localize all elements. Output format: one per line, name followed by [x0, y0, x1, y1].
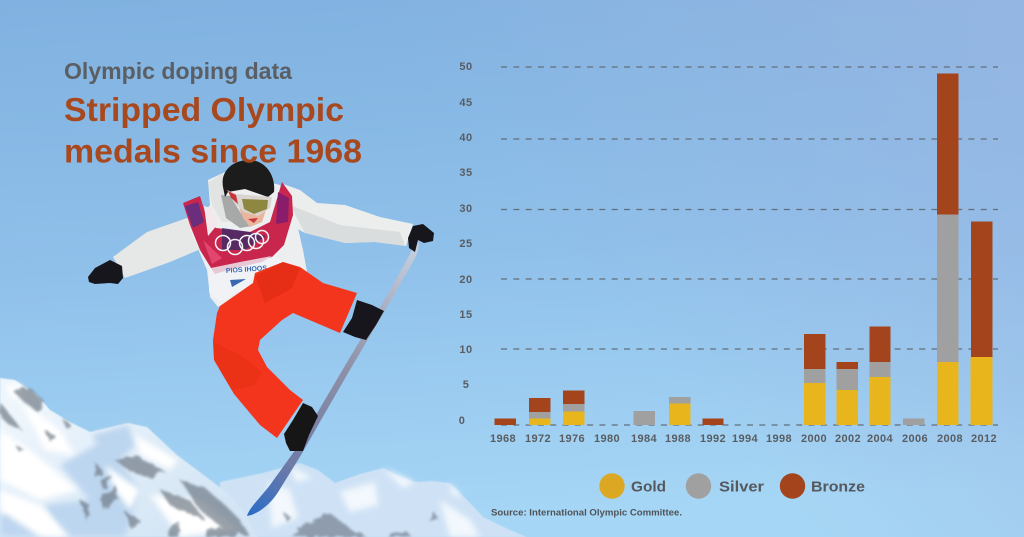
y axis labels: 25: [459, 238, 473, 250]
helmet: [223, 160, 274, 197]
headline: [64, 91, 362, 170]
near mountain: [0, 378, 258, 537]
y axis labels: 45: [459, 97, 473, 109]
gridlines: [501, 67, 998, 425]
snowboard: [247, 240, 419, 516]
x axis labels: 1968: [490, 433, 516, 445]
legend: gold: [599, 473, 666, 499]
olympic rings: [216, 230, 268, 254]
bar 2008: [937, 74, 958, 425]
bar 1988: [669, 397, 690, 425]
x axis labels: 1988: [665, 433, 691, 445]
stacked bar chart: [459, 61, 998, 445]
bar 1984: [634, 411, 655, 425]
source note: Source: International Olympic Committee.: [491, 508, 682, 518]
red pants: [213, 262, 357, 438]
x axis labels: 2000: [801, 433, 827, 445]
x axis labels: 1998: [766, 433, 792, 445]
x axis labels: 1976: [559, 433, 585, 445]
bar 2006: [903, 418, 924, 425]
legend: silver: [686, 473, 764, 499]
y axis labels: 5: [463, 379, 469, 391]
legend: gold: Gold: [631, 478, 666, 496]
bar 2000: [804, 334, 826, 425]
y axis labels: 30: [459, 203, 473, 215]
y axis labels: 0: [459, 415, 465, 427]
right glove: [408, 224, 434, 252]
x axis labels: 2008: [937, 433, 963, 445]
boot lower: [284, 403, 318, 451]
jacket: [190, 172, 308, 307]
x axis labels: 1984: [631, 433, 658, 445]
legend: [599, 473, 865, 499]
x axis labels: 1980: [594, 433, 620, 445]
x axis labels: 1992: [700, 433, 726, 445]
y axis labels: [459, 61, 473, 427]
legend: silver: Silver: [719, 478, 764, 496]
bar 1976: [563, 390, 584, 425]
bar 2012: [970, 222, 992, 425]
legend: bronze: [780, 473, 865, 499]
y axis labels: 20: [459, 274, 473, 286]
goggles: [227, 190, 272, 216]
bar 1968: [494, 418, 516, 425]
y axis labels: 10: [459, 344, 473, 356]
face: [238, 205, 266, 227]
hood lining: [221, 195, 252, 228]
headline: Stripped Olympic: [64, 91, 344, 128]
x axis labels: 2002: [835, 433, 861, 445]
left sleeve: [113, 218, 205, 278]
headline: medals since 1968: [64, 132, 362, 170]
x axis labels: 1994: [732, 433, 759, 445]
title block: [64, 58, 362, 170]
x axis labels: 1972: [525, 433, 551, 445]
y axis labels: 40: [459, 132, 473, 144]
bib text: PIOS IHOOS: [226, 265, 268, 275]
y axis labels: 35: [459, 167, 473, 179]
right sleeve: [283, 184, 413, 246]
illustration: snowboarder: [88, 160, 434, 516]
boot upper: [343, 300, 384, 340]
hood: [208, 173, 240, 222]
y axis labels: 15: [459, 309, 473, 321]
bar 1972: [529, 398, 550, 425]
race bib: patterned: [183, 182, 293, 302]
legend: bronze: Bronze: [811, 478, 865, 496]
x axis labels: 2012: [971, 433, 997, 445]
x axis labels: 2006: [902, 433, 928, 445]
bar 2004: [870, 326, 890, 425]
bar 2002: [836, 362, 858, 425]
x axis labels: [490, 433, 997, 445]
bar 1992: [702, 418, 724, 425]
bars: [494, 74, 992, 425]
far mountain: [220, 463, 527, 537]
subtitle: Olympic doping data: [64, 58, 292, 84]
illustration: snowy mountains: [0, 378, 527, 537]
y axis labels: 50: [459, 61, 473, 73]
left glove: [88, 260, 123, 284]
x axis labels: 2004: [867, 433, 894, 445]
